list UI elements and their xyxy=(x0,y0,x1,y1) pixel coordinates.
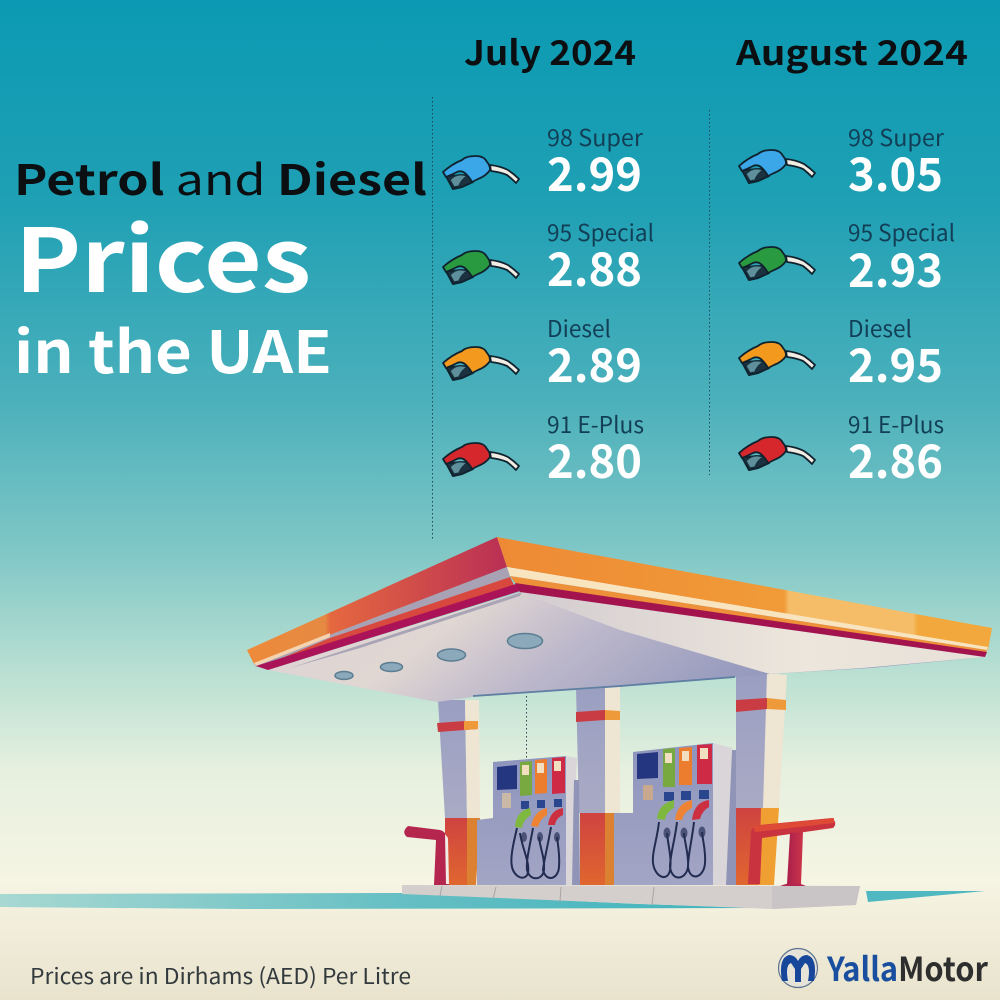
icon: orange nozzle Diesel August xyxy=(739,342,815,375)
price: 98 Super July: 2.99 xyxy=(547,139,642,205)
wordmark: YallaMotor xyxy=(826,943,989,991)
price: 91 E-Plus August: 2.86 xyxy=(848,426,943,492)
bench left xyxy=(404,826,449,885)
price: 95 Special August: 95 Special xyxy=(848,214,955,248)
roof underside xyxy=(268,592,985,702)
price: 95 Special July xyxy=(547,214,654,300)
icon: red nozzle 91 E-Plus xyxy=(443,443,519,476)
icon: red nozzle 91 E-Plus August xyxy=(739,437,815,470)
icon: green nozzle 95 Special xyxy=(443,251,519,284)
title: in the UAE xyxy=(14,306,332,390)
price: 91 E-Plus July: 2.80 xyxy=(547,426,642,492)
panel: August 2024 prices xyxy=(739,119,955,492)
price: 95 Special August xyxy=(848,214,955,301)
column heading: July 2024: July 2024 xyxy=(464,26,636,75)
bench right xyxy=(748,818,835,886)
icon: orange nozzle Diesel xyxy=(443,347,519,380)
icon: green nozzle 95 Special August xyxy=(739,247,815,280)
price: 95 Special August: 2.93 xyxy=(848,235,943,301)
price: Diesel July: 2.89 xyxy=(547,330,642,396)
ground strip xyxy=(0,891,985,909)
title: Petrol and Diesel xyxy=(14,147,427,208)
title xyxy=(14,147,427,390)
pillar right xyxy=(736,673,787,885)
price: Diesel July: Diesel xyxy=(547,310,611,344)
icon: logo mark xyxy=(778,948,818,988)
logo: YallaMotor xyxy=(778,943,989,991)
column heading: August 2024: August 2024 xyxy=(735,26,968,75)
pump right xyxy=(614,743,736,885)
pump left xyxy=(477,756,580,885)
price: 98 Super July: 98 Super xyxy=(547,119,643,153)
price: 95 Special July: 2.88 xyxy=(547,234,642,300)
illustration: petrol station xyxy=(0,537,992,909)
price: 91 E-Plus August: 91 E-Plus xyxy=(848,406,944,440)
roof right edge xyxy=(497,537,992,657)
price: Diesel August: 2.95 xyxy=(848,330,943,396)
icon: blue nozzle 98 Super August xyxy=(739,150,815,183)
panel: July 2024 prices xyxy=(443,119,654,492)
price: 95 Special July: 95 Special xyxy=(547,214,654,248)
price: Diesel August: Diesel xyxy=(848,310,912,344)
price: 98 Super August: 3.05 xyxy=(848,139,943,205)
title: Prices xyxy=(15,191,311,318)
roof left edge xyxy=(247,537,522,670)
pillar left xyxy=(437,700,480,885)
roof lights xyxy=(335,634,542,680)
pillar centre xyxy=(576,686,620,885)
icon: blue nozzle 98 Super xyxy=(443,156,519,189)
forecourt slab xyxy=(402,885,860,909)
price: 91 E-Plus July: 91 E-Plus xyxy=(547,406,644,440)
price: 98 Super August: 98 Super xyxy=(848,119,944,153)
footnote: Prices are in Dirhams (AED) Per Litre xyxy=(30,959,411,991)
